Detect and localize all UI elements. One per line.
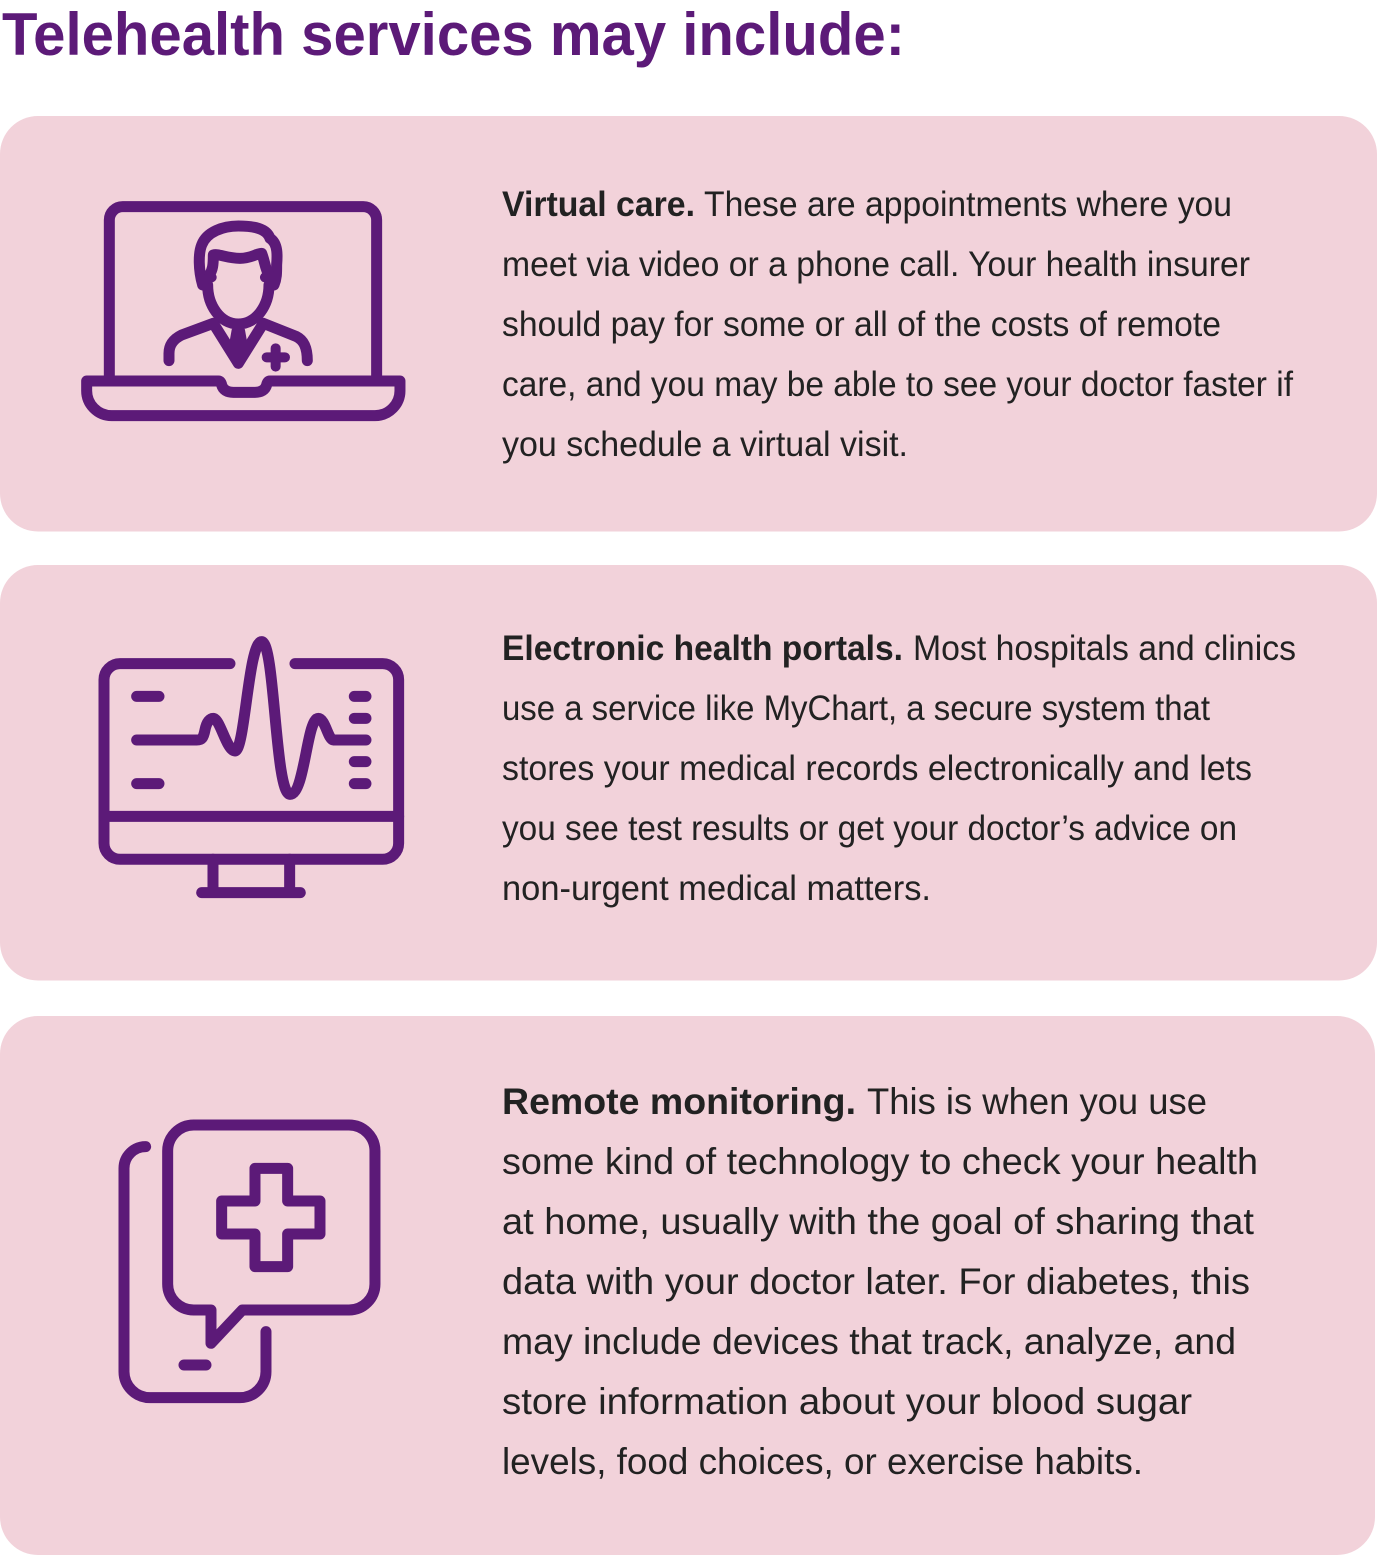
panel: electronic health portals bbox=[0, 565, 1377, 980]
text: virtual care description bbox=[502, 185, 1293, 464]
text: remote monitoring description: levels, food choices, or exercise habits. bbox=[502, 1441, 1143, 1482]
icon: monitor with heartbeat bbox=[104, 642, 399, 893]
panel: virtual care bbox=[0, 116, 1377, 532]
text: electronic health portals description: Electronic health portals. bbox=[502, 629, 903, 668]
panel background: electronic health portals bbox=[0, 565, 1377, 980]
text: virtual care description: meet via video or a phone call. Your health insurer bbox=[502, 245, 1250, 284]
text: virtual care description: These are appointments where you bbox=[704, 185, 1232, 224]
text: electronic health portals description: use a service like MyChart, a secure system that bbox=[502, 689, 1210, 728]
text: virtual care description: you schedule a virtual visit. bbox=[502, 425, 908, 464]
icon: phone with medical speech bubble bbox=[124, 1125, 375, 1398]
text: remote monitoring description: data with your doctor later. For diabetes, this bbox=[502, 1261, 1250, 1302]
panel background: remote monitoring bbox=[0, 1016, 1375, 1555]
text: remote monitoring description: some kind of technology to check your health bbox=[502, 1141, 1258, 1182]
text: remote monitoring description: This is when you use bbox=[867, 1081, 1207, 1122]
text: electronic health portals description bbox=[502, 629, 1296, 908]
text: electronic health portals description: non-urgent medical matters. bbox=[502, 869, 931, 908]
text: electronic health portals description: stores your medical records electronically and lets bbox=[502, 749, 1252, 788]
title: Telehealth services may include: bbox=[2, 1, 905, 68]
panel background: virtual care bbox=[0, 116, 1377, 532]
text: virtual care description: care, and you may be able to see your doctor faster if bbox=[502, 365, 1293, 404]
text: virtual care description: Virtual care. bbox=[502, 185, 695, 224]
text: remote monitoring description: store information about your blood sugar bbox=[502, 1381, 1192, 1422]
icon: doctor on laptop bbox=[87, 207, 400, 416]
text: remote monitoring description: may include devices that track, analyze, and bbox=[502, 1321, 1236, 1362]
text: remote monitoring description: at home, usually with the goal of sharing that bbox=[502, 1201, 1255, 1242]
text: electronic health portals description: Most hospitals and clinics bbox=[913, 629, 1296, 668]
text: remote monitoring description: Remote monitoring. bbox=[502, 1081, 856, 1122]
text: remote monitoring description bbox=[502, 1081, 1258, 1482]
text: virtual care description: should pay for some or all of the costs of remote bbox=[502, 305, 1221, 344]
panel: remote monitoring bbox=[0, 1016, 1375, 1555]
text: electronic health portals description: you see test results or get your doctor’s advice on bbox=[502, 809, 1237, 848]
